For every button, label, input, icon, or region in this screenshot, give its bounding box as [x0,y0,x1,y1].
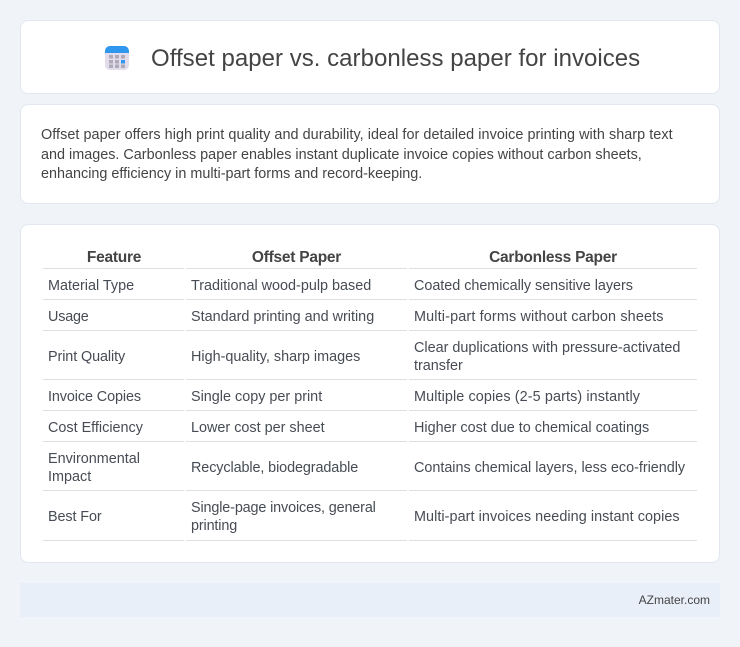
Print Quality carbonless: Clear duplications with pressure-activated [414,340,680,356]
Usage carbonless: Multi-part forms without carbon sheets [414,309,664,325]
row: Environmental Impact: Impact [48,469,91,485]
Best For offset: printing [191,518,237,534]
title: Offset paper vs. carbonless paper for invoices [151,45,640,72]
intro text [41,127,673,182]
row: Cost Efficiency: Cost Efficiency [48,420,143,436]
icon: calendar [105,46,129,70]
footer brand: AZmater.com [639,593,710,607]
comparison table panel [20,224,720,563]
intro text: Offset paper offers high print quality and durability, ideal for detailed invoice printing with sharp text [41,127,673,143]
intro text: and images. Carbonless paper enables instant duplicate invoice copies without carbon sheets, [41,147,642,163]
Environmental Impact offset: Recyclable, biodegradable [191,460,358,476]
Environmental Impact carbonless: Contains chemical layers, less eco-friendly [414,460,685,476]
row: Print Quality: Print Quality [48,349,125,365]
Best For offset [191,500,376,534]
footer bar [20,583,720,617]
Best For carbonless: Multi-part invoices needing instant copies [414,509,680,525]
column heading: Feature: Feature [87,249,141,266]
Best For offset: Single-page invoices, general [191,500,376,516]
row: Environmental Impact [48,451,140,485]
Cost Efficiency carbonless: Higher cost due to chemical coatings [414,420,649,436]
Cost Efficiency offset: Lower cost per sheet [191,420,325,436]
Print Quality carbonless [414,340,680,374]
Usage offset: Standard printing and writing [191,309,374,325]
row: Usage: Usage [48,309,89,325]
Print Quality offset: High-quality, sharp images [191,349,360,365]
row: Best For: Best For [48,509,102,525]
Invoice Copies carbonless: Multiple copies (2-5 parts) instantly [414,389,640,405]
Invoice Copies offset: Single copy per print [191,389,322,405]
column heading: Carbonless Paper: Carbonless Paper [489,249,617,266]
Material Type offset: Traditional wood-pulp based [191,278,371,294]
row: Environmental Impact: Environmental [48,451,140,467]
Material Type carbonless: Coated chemically sensitive layers [414,278,633,294]
Print Quality carbonless: transfer [414,358,463,374]
row: Material Type: Material Type [48,278,134,294]
header panel [20,20,720,94]
intro text: enhancing efficiency in multi-part forms and record-keeping. [41,166,422,182]
intro panel [20,104,720,204]
column heading: Offset Paper: Offset Paper [252,249,341,266]
row: Invoice Copies: Invoice Copies [48,389,141,405]
